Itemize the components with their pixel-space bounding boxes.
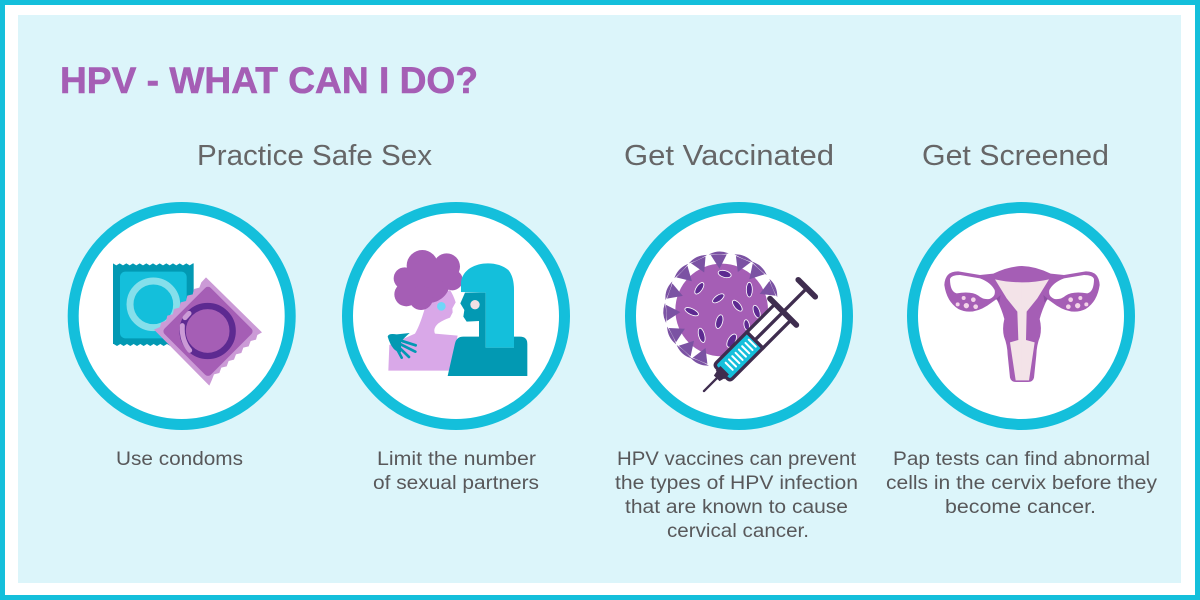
- title: HPV - WHAT CAN I DO?: [60, 60, 478, 101]
- text: limit partners: of sexual partners: [373, 473, 539, 494]
- text: vaccine description: [615, 449, 858, 542]
- text: use condoms: Use condoms: [116, 449, 243, 470]
- text: screening description: Pap tests can find abnormal: [893, 449, 1150, 470]
- heading: Get Screened: Get Screened: [922, 140, 1109, 172]
- icon: virus and syringe: [663, 251, 820, 404]
- icon: embracing couple: [388, 250, 527, 376]
- text: limit partners: [373, 449, 539, 494]
- heading: Get Vaccinated: Get Vaccinated: [624, 140, 834, 172]
- text: screening description: [886, 449, 1158, 518]
- panel: use condoms circle: [73, 208, 290, 424]
- text: screening description: become cancer.: [945, 497, 1096, 518]
- text: vaccine description: that are known to cause: [625, 497, 848, 518]
- text: vaccine description: the types of HPV infection: [615, 473, 858, 494]
- text: vaccine description: HPV vaccines can prevent: [617, 449, 857, 470]
- panel: screening circle: [912, 208, 1130, 424]
- icon: condom packets: [113, 263, 262, 386]
- text: vaccine description: cervical cancer.: [667, 521, 809, 542]
- icon: uterus: [944, 266, 1100, 382]
- heading: Practice Safe Sex: Practice Safe Sex: [197, 140, 433, 172]
- panel: limit partners circle: [348, 208, 564, 424]
- panel: vaccine circle: [630, 208, 848, 424]
- text: screening description: cells in the cervix before they: [886, 473, 1158, 494]
- text: limit partners: Limit the number: [377, 449, 537, 470]
